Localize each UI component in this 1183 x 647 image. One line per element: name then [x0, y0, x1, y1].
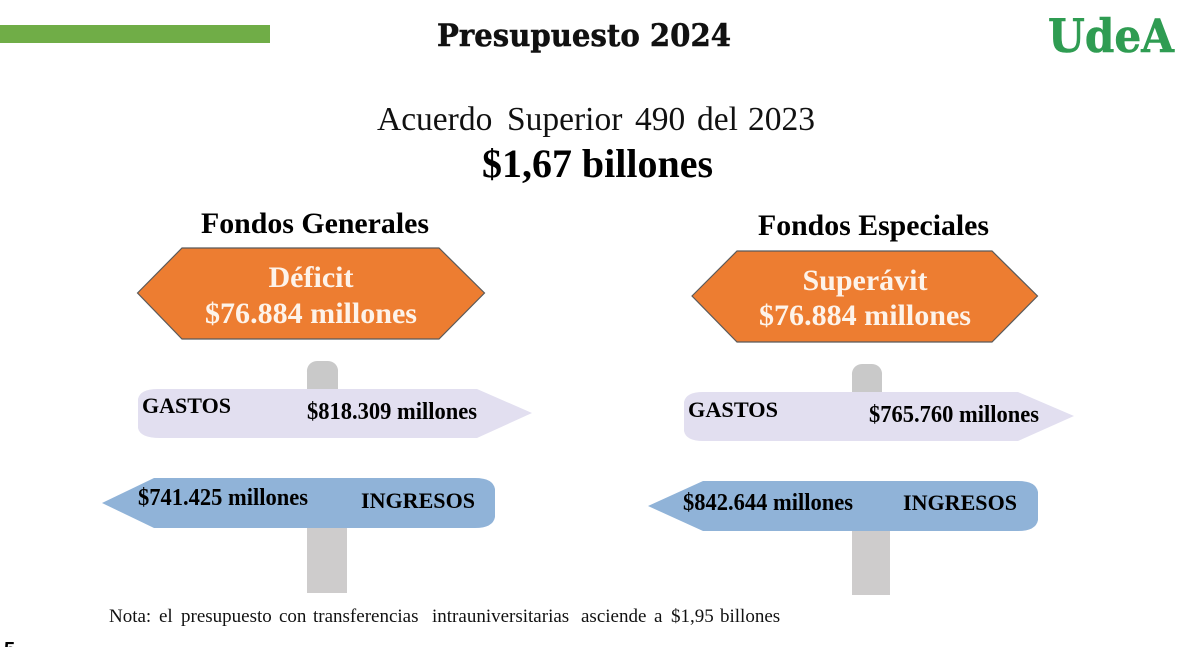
subtitle: del: [697, 101, 746, 138]
footnote: asciende: [581, 606, 651, 627]
footnote: transferencias: [313, 606, 423, 627]
green header bar: [0, 25, 270, 43]
logo: UdeA: UdeA: [1048, 9, 1175, 63]
panel: Fondos Generales: [102, 207, 532, 593]
hexagon: Déficit: [138, 248, 484, 339]
footnote: Nota:: [109, 606, 156, 627]
sign post: [307, 361, 347, 593]
arrow: GASTOS: [684, 392, 1074, 441]
hexagon: Déficit: Déficit: [268, 261, 354, 294]
hexagon: Déficit: $76.884 millones: [205, 297, 417, 330]
arrow: GASTOS: $818.309 millones: [307, 399, 477, 425]
hexagon: Superávit: $76.884 millones: [759, 299, 971, 332]
subtitle: 490: [635, 101, 694, 138]
footnote: presupuesto: [181, 606, 277, 627]
footnote: a: [654, 606, 667, 627]
title: Presupuesto 2024: [437, 18, 731, 54]
hexagon: Superávit: [692, 251, 1038, 342]
footnote: el: [159, 606, 177, 627]
subtitle: Superior: [507, 101, 631, 138]
total amount: $1,67 billones: [482, 141, 713, 186]
subtitle: Acuerdo: [377, 101, 501, 138]
panel: Fondos Especiales: [648, 209, 1074, 595]
hexagon: Superávit: Superávit: [802, 264, 928, 297]
arrow: INGRESOS: $741.425 millones: [138, 485, 308, 511]
footnote: intrauniversitarias: [432, 606, 574, 627]
subtitle: 2023: [748, 101, 815, 138]
arrow: INGRESOS: INGRESOS: [361, 488, 475, 513]
arrow: GASTOS: [138, 389, 532, 438]
sign post: [852, 364, 890, 595]
arrow: GASTOS: $765.760 millones: [869, 402, 1039, 428]
arrow: INGRESOS: INGRESOS: [903, 490, 1017, 515]
arrow: INGRESOS: [102, 478, 495, 528]
arrow: INGRESOS: [648, 481, 1038, 531]
arrow: GASTOS: GASTOS: [142, 393, 231, 418]
heading: Fondos Especiales: Fondos Especiales: [758, 209, 989, 242]
arrow: GASTOS: GASTOS: [688, 397, 778, 422]
footnote: con: [279, 606, 311, 627]
footnote: billones: [720, 606, 780, 627]
footnote: $1,95: [671, 606, 718, 627]
arrow: INGRESOS: $842.644 millones: [683, 490, 853, 516]
heading: Fondos Generales: Fondos Generales: [201, 207, 429, 240]
